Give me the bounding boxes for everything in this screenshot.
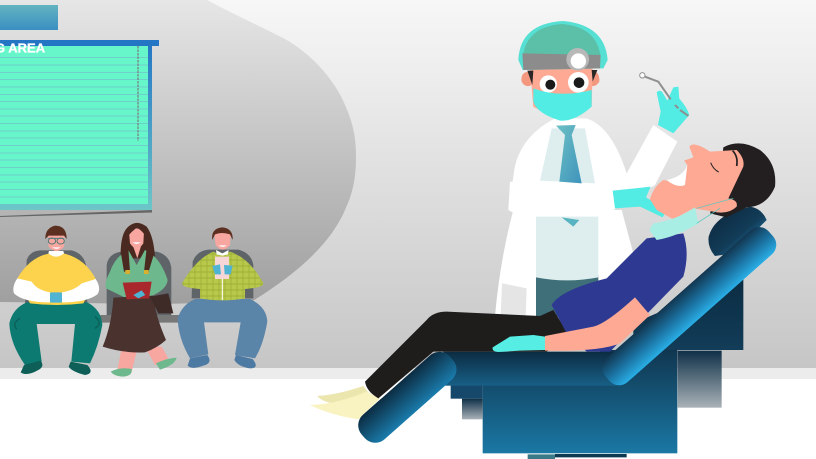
right eye	[568, 72, 589, 93]
shirt lower	[536, 217, 598, 280]
blind slats	[0, 58, 148, 197]
mask strap	[697, 198, 733, 223]
far foot	[317, 386, 372, 403]
chair	[192, 250, 253, 298]
mirror lens	[571, 53, 586, 69]
chair back support	[633, 276, 743, 350]
gloves	[212, 264, 233, 274]
window frame right	[0, 44, 152, 210]
neck mask	[649, 207, 698, 240]
rear support	[678, 351, 722, 408]
upper base under backrest	[600, 350, 677, 385]
face	[48, 232, 65, 251]
sweater	[17, 253, 96, 305]
glasses	[48, 238, 64, 244]
person: man in yellow sweater	[9, 226, 102, 375]
hair back	[121, 223, 155, 258]
patient head	[649, 143, 775, 240]
hair	[212, 227, 233, 240]
finger tips holding instrument	[675, 105, 688, 116]
neck	[133, 245, 141, 258]
person: woman in green sweater	[103, 223, 177, 377]
hair	[45, 226, 67, 239]
tie	[556, 125, 582, 183]
backrest	[597, 222, 781, 391]
legs	[117, 347, 168, 372]
dentist upper body	[508, 21, 689, 217]
window with blinds	[0, 40, 159, 217]
sleeve	[508, 182, 613, 213]
trousers	[536, 275, 598, 317]
surgical cap	[518, 21, 608, 70]
waiting people	[9, 223, 267, 377]
left pupil	[545, 80, 555, 90]
face	[650, 145, 744, 219]
base step	[451, 385, 483, 399]
face mask	[533, 88, 592, 121]
blind surface	[0, 46, 148, 204]
lab coat	[508, 118, 677, 213]
floor plates	[528, 454, 555, 459]
sign board	[0, 5, 58, 30]
shirt	[552, 233, 687, 352]
person: man in plaid sweater	[178, 227, 267, 368]
collar	[216, 250, 229, 256]
floor skirting band	[0, 368, 816, 379]
ears	[521, 70, 599, 86]
gloves	[50, 292, 62, 303]
left eye	[540, 75, 557, 93]
chair	[107, 252, 171, 315]
dentist lower body	[495, 210, 633, 317]
shoes	[188, 355, 256, 368]
wall shape: grey curved panel	[0, 0, 356, 304]
arm	[545, 297, 650, 351]
headrest	[708, 207, 767, 256]
smile	[218, 245, 227, 247]
glove	[493, 335, 545, 352]
near foot	[310, 392, 380, 419]
mirror ring	[566, 48, 589, 71]
smile	[132, 242, 141, 244]
window shadow	[0, 210, 152, 217]
shoes	[111, 358, 177, 377]
dental instrument	[645, 77, 671, 99]
trousers	[365, 310, 570, 398]
collar	[48, 251, 64, 257]
braid ties	[125, 270, 149, 274]
face	[129, 228, 144, 248]
paper	[215, 257, 229, 279]
pants	[178, 299, 267, 358]
glove on chin	[613, 187, 667, 217]
hair fringe	[127, 224, 146, 237]
raised glove	[657, 87, 689, 133]
footrest	[352, 346, 462, 449]
chair	[25, 250, 87, 305]
open mouth	[667, 165, 687, 186]
sweater	[105, 250, 168, 298]
zipper	[221, 278, 224, 300]
eyebrow	[733, 151, 737, 166]
shoes	[21, 361, 91, 375]
smile	[52, 247, 61, 249]
glove	[133, 290, 145, 298]
instrument mirror	[640, 73, 645, 78]
front support	[462, 399, 483, 419]
knee marks	[15, 317, 99, 329]
closed eye	[711, 163, 719, 172]
window top rail	[0, 40, 159, 46]
bag	[150, 293, 173, 313]
bench bar	[100, 315, 180, 323]
head band	[522, 53, 601, 70]
tie tip	[562, 217, 579, 227]
sleeves	[13, 278, 99, 302]
coat skirt	[495, 210, 633, 317]
sweater	[182, 252, 263, 300]
floor	[0, 379, 816, 459]
dental chair	[443, 276, 743, 459]
book	[123, 282, 152, 299]
hair	[710, 143, 775, 217]
shirt	[540, 128, 595, 183]
pants	[9, 302, 102, 365]
patient	[310, 233, 687, 419]
face	[530, 67, 593, 115]
head mirror	[566, 48, 589, 71]
coat pocket	[501, 283, 527, 316]
side hair	[527, 70, 597, 85]
base column	[483, 385, 677, 453]
floor plate dark	[555, 454, 627, 457]
face	[214, 231, 231, 250]
right pupil	[574, 77, 584, 88]
skirt	[103, 296, 166, 352]
cap inner	[523, 24, 601, 57]
blind cord	[137, 46, 139, 141]
chair rests	[352, 207, 781, 449]
hair strands	[121, 248, 155, 272]
seat	[443, 352, 617, 386]
